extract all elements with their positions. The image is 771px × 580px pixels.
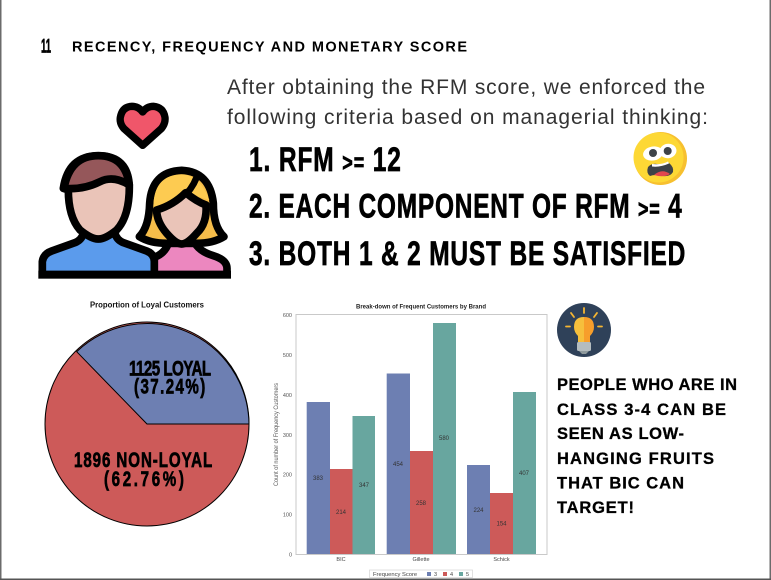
y axis: 200	[283, 472, 292, 478]
pie label: loyal	[129, 356, 211, 398]
takeaway text: PEOPLE WHO ARE IN	[557, 376, 737, 394]
bar chart title: Break-down of Frequent Customers by Brand	[356, 304, 486, 310]
bars: Gillette	[387, 323, 456, 554]
icon: light bulb	[557, 303, 611, 357]
y axis: 500	[283, 353, 292, 359]
y axis: 400	[283, 393, 292, 399]
criteria list: 2. EACH COMPONENT OF RFM >= 4	[249, 188, 682, 226]
icon: shocked emoji	[634, 132, 687, 185]
takeaway text	[557, 376, 737, 517]
x axis labels	[336, 557, 510, 563]
bars: Gillette: 258	[416, 501, 427, 507]
chart: frequent customers by brand	[274, 304, 547, 578]
y axis: 100	[283, 512, 292, 518]
bars: Schick: 154	[496, 522, 507, 528]
legend	[370, 570, 472, 578]
takeaway text: CLASS 3-4 CAN BE	[557, 401, 726, 419]
bars: Schick	[467, 392, 536, 554]
pie label: non-loyal: 1896 NON-LOYAL	[74, 447, 212, 472]
takeaway text: SEEN AS LOW-	[557, 425, 684, 443]
x axis labels: Gillette	[412, 557, 430, 563]
bars: BIC: 383	[313, 476, 324, 482]
criteria list: 3. BOTH 1 & 2 MUST BE SATISFIED	[249, 235, 685, 273]
bars: Schick: 407	[519, 471, 530, 477]
bars: BIC: 347	[359, 483, 370, 489]
title: RECENCY, FREQUENCY AND MONETARY SCORE	[72, 40, 467, 56]
y axis	[283, 313, 292, 558]
intro text	[227, 76, 708, 129]
bars: Gillette: 454	[393, 462, 404, 468]
pie label: non-loyal	[74, 447, 212, 491]
x axis labels: Schick	[493, 557, 510, 563]
legend: 4	[450, 572, 453, 578]
takeaway text: TARGET!	[557, 499, 634, 517]
intro text: After obtaining the RFM score, we enforced the	[227, 76, 705, 99]
chart: pie of loyal customers	[45, 300, 249, 526]
bars: Schick: 224	[473, 508, 484, 514]
bars: Gillette: 580	[439, 436, 450, 442]
y axis label: Count of number of Frequency Customers	[274, 383, 280, 486]
legend: Frequency Score	[373, 572, 417, 578]
y axis: 600	[283, 313, 292, 319]
pie label: non-loyal: (62.76%)	[104, 466, 184, 491]
y axis: 300	[283, 433, 292, 439]
intro text: following criteria based on managerial thinking:	[227, 106, 708, 129]
legend: 5	[466, 572, 469, 578]
icon: couple with heart	[38, 106, 231, 279]
page number: 11	[41, 36, 51, 58]
pie label: loyal: (37.24%)	[134, 374, 205, 398]
criteria list: 1. RFM >= 12	[249, 141, 401, 179]
legend: 3	[434, 572, 437, 578]
x axis labels: BIC	[336, 557, 346, 563]
pie label: loyal: 1125 LOYAL	[129, 356, 211, 380]
criteria list	[249, 141, 685, 273]
bars: BIC	[307, 402, 375, 554]
bars: BIC: 214	[336, 510, 347, 516]
takeaway text: HANGING FRUITS	[557, 450, 714, 468]
takeaway text: THAT BIC CAN	[557, 474, 684, 492]
y axis: 0	[289, 552, 292, 558]
pie title: Proportion of Loyal Customers	[90, 300, 205, 310]
